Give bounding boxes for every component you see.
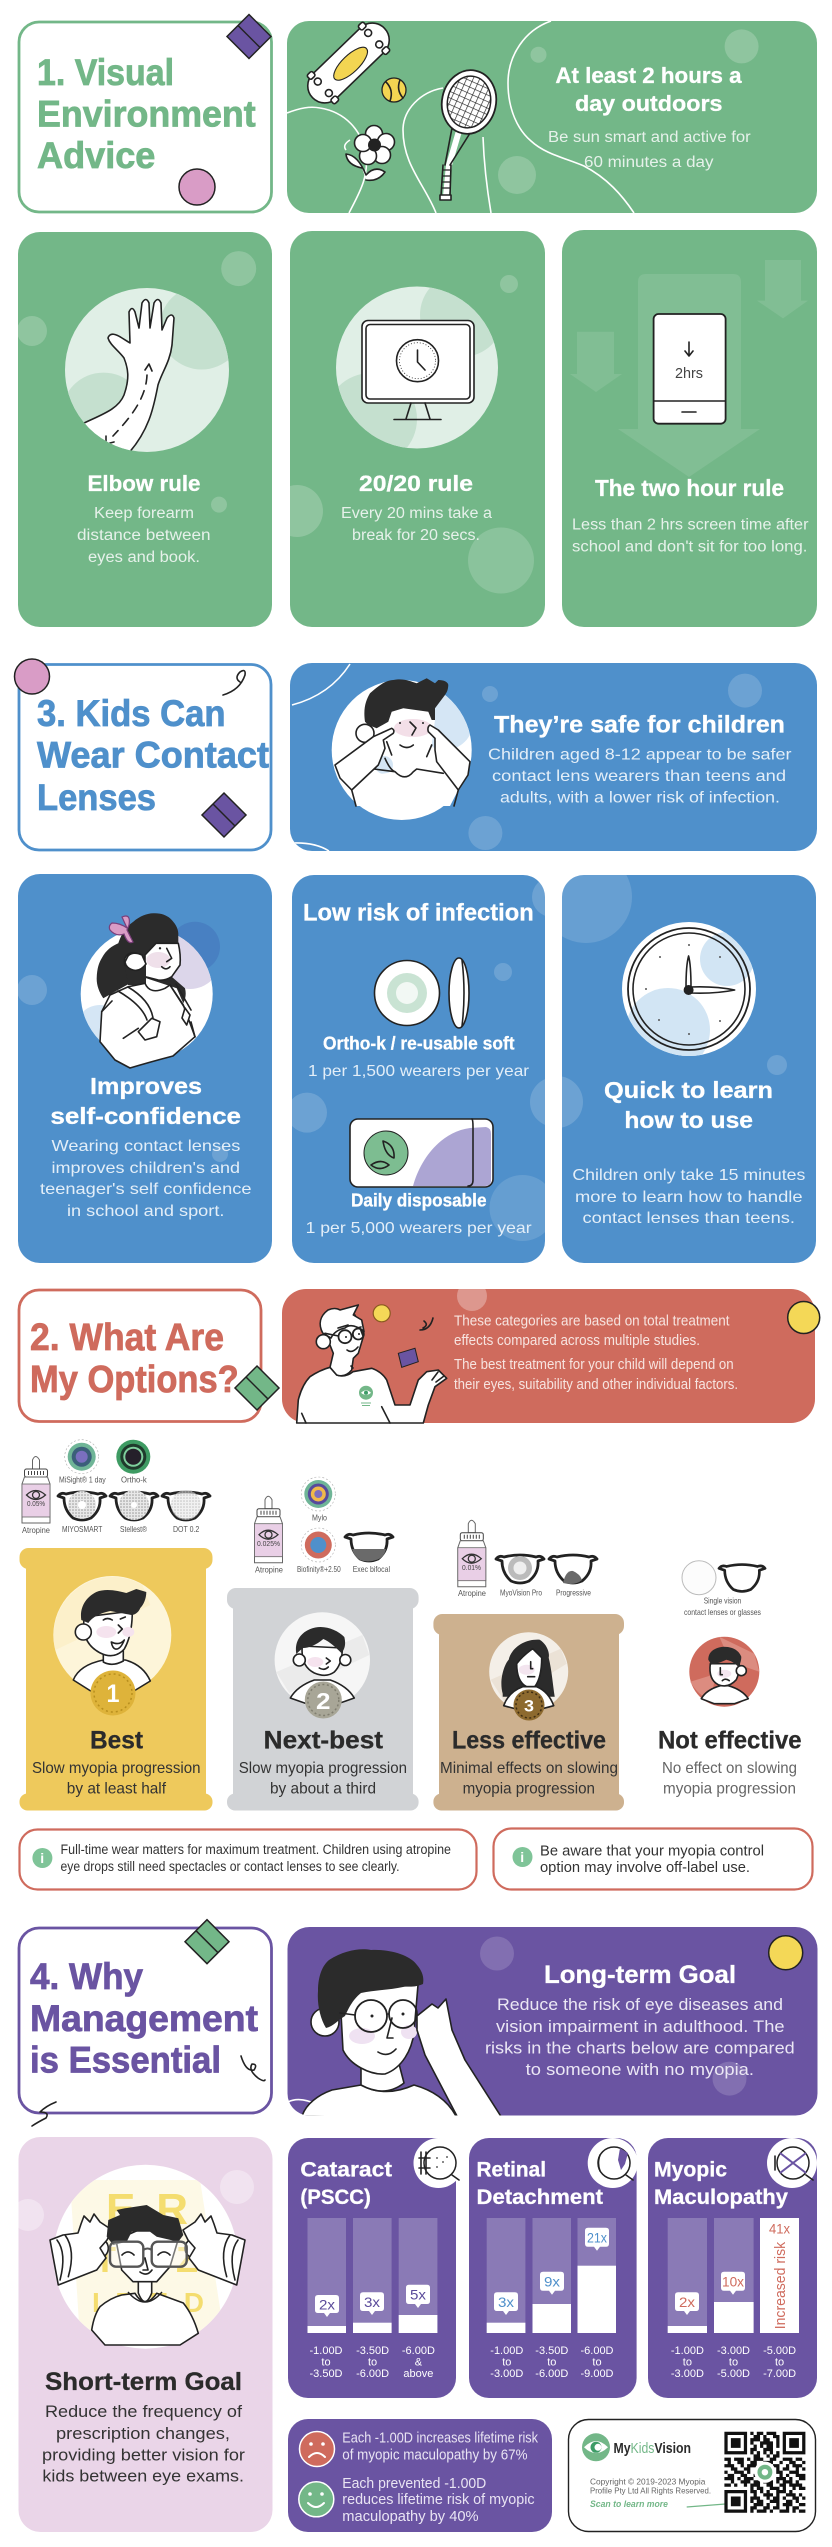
icon: bronze medal (514, 1690, 544, 1720)
text: full-time wear note: eye drops still need spectacles or contact lenses to see clearly. (60, 1859, 400, 1874)
text: Improves self-confidence (40, 1073, 252, 1220)
bar chart: retinal detachment risk: 21x (587, 2230, 607, 2246)
panel: 2. What Are My Options? title card (19, 1290, 279, 1422)
text: Daily disposable: 1 per 5,000 wearers per year (306, 1220, 532, 1237)
panel: Retinal Detachment chart (469, 2138, 638, 2398)
text: Short-term Goal: Short-term Goal (45, 2368, 242, 2396)
text: Short-term Goal: prescription changes, (56, 2425, 230, 2443)
text: each prevented -1.00D reduces risk: Each prevented -1.00D (342, 2475, 486, 2492)
face (145, 943, 180, 980)
title: 3. Kids Can Wear Contact Lenses: Lenses (37, 777, 156, 818)
icon: info: i (520, 1849, 524, 1865)
icon: flower (345, 126, 394, 180)
illustration: girl with backpack (75, 913, 221, 1068)
labels: retinal axis: to (502, 2357, 511, 2369)
text: They're safe for children: Children aged 8-12 appear to be safer (488, 746, 792, 763)
icons: best treatment options: Atropine (22, 1525, 50, 1535)
icons: less effective treatment options: MyoVision Pro (500, 1588, 542, 1598)
title: 2. What Are My Options? (30, 1317, 239, 1401)
bar chart: myopic maculopathy risk: 10x (722, 2274, 744, 2290)
icon: phone showing 2hrs (654, 314, 726, 424)
body (100, 983, 195, 1068)
text: full-time wear note (60, 1842, 451, 1874)
icons: less effective treatment options: Atropine (458, 1588, 486, 1598)
title: 3. Kids Can Wear Contact Lenses (37, 693, 269, 818)
eye chart letters: T Z (94, 2239, 198, 2280)
icon: info: i (40, 1850, 44, 1866)
panel: Cataract (PSCC) chart (288, 2138, 464, 2398)
eye chart letters: E R (106, 2185, 188, 2234)
illustration: sad boy (689, 1637, 759, 1707)
icon: myopic maculopathy eye (767, 2138, 817, 2188)
text: Best (32, 1727, 200, 1798)
text: Next-best: Slow myopia progression (239, 1760, 407, 1777)
text: category explanation: The best treatment for your child will depend on (454, 1357, 734, 1373)
labels: cataract axis: to (321, 2357, 331, 2369)
labels: retinal axis (490, 2345, 614, 2380)
icons: next-best treatment options: Mylo (312, 1513, 327, 1523)
icon: info (32, 1848, 52, 1868)
text: 20/20 rule: break for 20 secs. (352, 527, 480, 544)
callout: off-label use (494, 1828, 812, 1890)
text: off-label note: option may involve off-label use. (540, 1860, 750, 1876)
text: Short-term Goal (42, 2368, 246, 2486)
text: 20/20 rule: 20/20 rule (359, 471, 473, 496)
text: Quick to learn how to use: how to use (624, 1107, 753, 1133)
icon: green box (185, 1920, 229, 1964)
icon: squiggle (420, 1318, 433, 1330)
text: each -1.00D increases risk: Each -1.00D increases lifetime risk (342, 2430, 538, 2447)
text: Long-term Goal: Long-term Goal (544, 1961, 736, 1989)
QR code (724, 2432, 805, 2513)
text: full-time wear note: Full-time wear matters for maximum treatment. Children using atropine (60, 1842, 451, 1857)
panel: lifetime risk facts (288, 2419, 552, 2532)
panel: Improves self-confidence (17, 874, 272, 1263)
title: 4. Why Management is Essential: Management (30, 1998, 258, 2039)
text: They're safe for children: adults, with a lower risk of infection. (500, 790, 780, 806)
text: Not effective: Not effective (658, 1727, 802, 1755)
labels: retinal axis: -1.00D (490, 2345, 523, 2357)
icon: squiggle (32, 2102, 56, 2126)
text: Ortho-k / re-usable soft: 1 per 1,500 wearers per year (308, 1063, 530, 1080)
labels: maculopathy axis: -3.00D (671, 2368, 704, 2380)
labels: retinal axis: to (547, 2357, 556, 2369)
title: 3. Kids Can Wear Contact Lenses: 3. Kids Can (37, 693, 226, 734)
icons: not effective treatment options (682, 1561, 765, 1617)
title: 2. What Are My Options?: 2. What Are (30, 1317, 224, 1359)
title: 4. Why Management is Essential: 4. Why (30, 1956, 143, 1997)
text: Improves self-confidence: improves children's and (52, 1160, 240, 1177)
face (116, 2225, 178, 2282)
text: At least 2 hours a day outdoors (548, 63, 751, 171)
labels: maculopathy axis: -7.00D (763, 2368, 796, 2380)
text: Quick to learn how to use: Quick to learn (604, 1077, 773, 1103)
labels: retinal axis: -6.00D (580, 2345, 614, 2357)
text: category explanation (454, 1314, 738, 1393)
heading: Myopic Maculopathy: Maculopathy (654, 2185, 788, 2209)
icon: squiggle (223, 671, 245, 695)
heading: Retinal Detachment: Detachment (476, 2185, 603, 2209)
text: Elbow rule: Keep forearm (94, 505, 194, 522)
bar chart: myopic maculopathy risk: 41x (769, 2220, 790, 2236)
panel: outdoors (287, 14, 817, 213)
panel: They're safe for children (290, 663, 817, 851)
icon: small down arrow right (757, 260, 808, 318)
text: Quick to learn how to use: contact lenses than teens. (582, 1210, 795, 1227)
labels: cataract axis: & (415, 2357, 423, 2369)
icon: sad face (300, 2432, 334, 2466)
icons: best treatment options: Ortho-k (121, 1475, 147, 1485)
labels: cataract axis: to (368, 2357, 377, 2369)
bar chart: retinal detachment risk (487, 2218, 616, 2333)
text: Quick to learn how to use: Children only take 15 minutes (572, 1167, 805, 1184)
bar chart: cataract risk: 5x (410, 2286, 426, 2302)
title: 1. Visual Environment Advice (37, 52, 256, 176)
text: Next-best: Next-best (264, 1727, 384, 1755)
icons: next-best treatment options: 0.025% (257, 1541, 280, 1548)
text: Long-term Goal: vision impairment in adulthood. The (496, 2018, 785, 2036)
text: Next-best (239, 1727, 407, 1798)
icon: ortho-k lens front and side (374, 958, 469, 1028)
icons: next-best treatment options: Biofinity®+2.50 (297, 1564, 341, 1574)
icons: not effective treatment options: Single vision (704, 1596, 742, 1606)
panel: Myopic Maculopathy chart (648, 2138, 817, 2398)
text: Elbow rule: eyes and book. (88, 549, 200, 566)
text: copyright (590, 2476, 711, 2495)
title: 1. Visual Environment Advice: 1. Visual (37, 52, 174, 93)
labels: maculopathy axis: -5.00D (717, 2368, 750, 2380)
bar chart: cataract risk: 3x (364, 2294, 380, 2310)
text: At least 2 hours a day outdoors: day outdoors (575, 91, 722, 116)
icon: info (512, 1847, 532, 1867)
icon: gold medal: 1 (106, 1680, 120, 1708)
panel: 4. Why Management is Essential title card (19, 1920, 272, 2126)
icon: silver medal: 2 (316, 1688, 330, 1714)
text: Not effective: No effect on slowing (662, 1760, 797, 1777)
text: 20/20 rule (341, 471, 492, 544)
icon: purple box (227, 14, 271, 58)
panel: 1. Visual Environment Advice title card (19, 14, 272, 212)
heading: Myopic Maculopathy: Myopic (654, 2158, 727, 2182)
text: Elbow rule: Elbow rule (88, 471, 200, 496)
labels: cataract axis: -6.00D (402, 2345, 435, 2357)
text: Elbow rule (77, 471, 211, 566)
icon: small down arrow left (570, 332, 622, 392)
text: off-label note (540, 1844, 764, 1876)
bar chart: myopic maculopathy risk: 2x (679, 2294, 695, 2310)
text: Ortho-k / re-usable soft: Ortho-k / re-usable soft (323, 1034, 515, 1054)
hair (107, 2205, 183, 2245)
text: They're safe for children: contact lens wearers than teens and (492, 768, 786, 785)
text: each -1.00D increases risk (342, 2430, 538, 2463)
panel: Not effective (658, 1637, 802, 1798)
icons: best treatment options: MIYOSMART (62, 1524, 102, 1534)
text: Quick to learn how to use (572, 1077, 805, 1227)
text: The two hour rule: school and don't sit for too long. (572, 538, 807, 555)
illustration: girl with medal (489, 1632, 568, 1711)
labels: maculopathy axis: to (775, 2357, 784, 2369)
text: MyKidsVision: MyKidsVision (614, 2440, 691, 2457)
title: 1. Visual Environment Advice: Advice (37, 135, 155, 176)
text: At least 2 hours a day outdoors: Be sun smart and active for (548, 129, 751, 146)
labels: cataract axis: -6.00D (356, 2368, 389, 2380)
icon: happy face (299, 2482, 334, 2517)
icon: daily disposable blister pack (350, 1119, 493, 1187)
text: Less effective: Less effective (452, 1727, 606, 1755)
panel: MyKidsVision logo and QR (568, 2420, 816, 2532)
bar chart: retinal detachment risk: 9x (544, 2274, 560, 2290)
icon: gold medal (90, 1670, 136, 1716)
text: 20/20 rule: Every 20 mins take a (341, 505, 492, 522)
labels: maculopathy axis: -1.00D (671, 2345, 704, 2357)
bar chart: cataract risk: 2x (319, 2296, 335, 2312)
icon: tennis ball (382, 78, 406, 102)
text: Daily disposable: Daily disposable (351, 1191, 486, 1211)
icons: next-best treatment options: Exec bifocal (353, 1564, 390, 1574)
face (387, 708, 435, 765)
panel: Short-term Goal (12, 2137, 272, 2532)
icon: yellow sun (769, 1936, 803, 1970)
text: Short-term Goal: kids between eye exams. (42, 2468, 244, 2486)
heading: Retinal Detachment (476, 2158, 603, 2209)
icons: best treatment options: 0.05% (27, 1501, 45, 1508)
panel: Elbow rule (17, 232, 272, 627)
labels: cataract axis: -1.00D (309, 2345, 343, 2357)
icon: tennis racket (436, 65, 502, 200)
text: Less effective: myopia progression (463, 1780, 595, 1798)
panel: 3. Kids Can Wear Contact Lenses title card (14, 659, 271, 850)
heading: Myopic Maculopathy (654, 2158, 788, 2209)
bar chart: myopic maculopathy risk (668, 2218, 799, 2333)
icons: best treatment options: MiSight® 1 day (59, 1475, 106, 1485)
body (352, 770, 458, 806)
labels: retinal axis: -9.00D (580, 2368, 614, 2380)
heading: Low risk of infection: Low risk of infection (303, 900, 534, 927)
panel: The two hour rule (562, 230, 817, 627)
text: They're safe for children (488, 712, 792, 806)
panel: category explanation (282, 1281, 820, 1423)
icon: squiggle (241, 2056, 265, 2081)
labels: retinal axis: to (592, 2357, 602, 2369)
text: Best: by at least half (67, 1780, 167, 1798)
icons: best treatment options (22, 1440, 210, 1535)
icon: purple box (398, 1348, 418, 1367)
icon: small yellow ball (373, 1305, 390, 1322)
glasses (110, 2242, 143, 2267)
text: each prevented -1.00D reduces risk: maculopathy by 40% (342, 2508, 479, 2525)
panel: Next-best (227, 1588, 419, 1810)
text: each -1.00D increases risk: of myopic maculopathy by 67% (342, 2446, 528, 2463)
bar chart: retinal detachment risk: 3x (498, 2294, 514, 2310)
heading: Cataract (PSCC): (PSCC) (300, 2185, 371, 2209)
illustration: forearm and hand (65, 288, 229, 452)
icon: MyKidsVision logo (582, 2433, 610, 2461)
text: category explanation: effects compared across multiple studies. (454, 1333, 700, 1349)
arms (50, 2214, 112, 2285)
text: The two hour rule (572, 475, 808, 555)
text: Not effective (658, 1727, 802, 1798)
text: Best: Best (90, 1727, 144, 1755)
icon: pink ball (179, 169, 215, 205)
labels: retinal axis: -3.00D (490, 2368, 523, 2380)
text: each prevented -1.00D reduces risk: reduces lifetime risk of myopic (342, 2491, 535, 2508)
icons: next-best treatment options (254, 1477, 393, 1575)
hands (335, 728, 394, 790)
text: each prevented -1.00D reduces risk (342, 2475, 535, 2525)
icon: phone showing 2hrs: 2hrs (675, 365, 703, 382)
text: The two hour rule: Less than 2 hrs screen time after (572, 516, 808, 533)
icon: skateboard (299, 14, 398, 112)
icons: next-best treatment options: Atropine (255, 1565, 283, 1575)
icon: bronze medal: 3 (524, 1696, 534, 1716)
body (92, 2293, 198, 2345)
text: Elbow rule: distance between (77, 527, 211, 544)
text: Improves self-confidence: self-confidence (50, 1103, 241, 1129)
text: Long-term Goal: risks in the charts below are compared (485, 2039, 795, 2057)
labels: cataract axis: -3.50D (356, 2345, 389, 2357)
title: 3. Kids Can Wear Contact Lenses: Wear Contact (37, 735, 269, 776)
text: Daily disposable (306, 1191, 532, 1237)
labels: retinal axis: -3.50D (535, 2345, 568, 2357)
text: Short-term Goal: Reduce the frequency of (45, 2403, 242, 2421)
panel: Long-term Goal (288, 1927, 818, 2118)
heading: Retinal Detachment: Retinal (476, 2158, 546, 2182)
text: At least 2 hours a day outdoors: At least 2 hours a (555, 63, 742, 88)
labels: cataract axis: -3.50D (309, 2368, 343, 2380)
icon: pink ball (14, 659, 50, 694)
labels: maculopathy axis: to (683, 2357, 692, 2369)
text: Quick to learn how to use: more to learn how to handle (575, 1189, 803, 1206)
icon: yellow sun (788, 1302, 820, 1334)
eye chart letters: I E E D (92, 2287, 204, 2318)
title: 4. Why Management is Essential: is Essential (30, 2040, 221, 2080)
labels: maculopathy axis (671, 2345, 796, 2380)
icon: silver medal (305, 1682, 342, 1718)
text: Best: Slow myopia progression (32, 1760, 200, 1777)
icon: purple box (202, 793, 246, 837)
panel: 20/20 rule (271, 231, 545, 627)
text: Long-term Goal: Reduce the risk of eye diseases and (497, 1996, 783, 2014)
panel: Quick to learn how to use (562, 875, 816, 1263)
heading: Cataract (PSCC): Cataract (300, 2158, 392, 2182)
bar chart: cataract risk (308, 2218, 437, 2333)
text: copyright: Copyright © 2019-2023 Myopia (590, 2476, 706, 2486)
text: category explanation: their eyes, suitability and other individual factors. (454, 1377, 738, 1393)
text: category explanation: These categories are based on total treatment (454, 1314, 730, 1330)
text: Ortho-k / re-usable soft (308, 1034, 530, 1080)
text: Improves self-confidence: in school and sport. (67, 1203, 224, 1220)
text: Long-term Goal: to someone with no myopia. (526, 2061, 754, 2079)
labels: maculopathy axis: -5.00D (763, 2345, 796, 2357)
text: off-label note: Be aware that your myopia control (540, 1844, 764, 1860)
eye chart letters (92, 2185, 204, 2318)
icons: best treatment options: Stellest® (120, 1524, 148, 1534)
text: Less effective: Minimal effects on slowing (440, 1760, 618, 1777)
text: The two hour rule: The two hour rule (595, 475, 784, 501)
text: Improves self-confidence: Wearing contact lenses (52, 1138, 240, 1155)
bar chart: myopic maculopathy risk: Increased risk (772, 2241, 789, 2329)
icon: retinal detachment eye (588, 2138, 638, 2188)
text: Improves self-confidence: teenager's self confidence (40, 1181, 252, 1198)
illustration: boy with medal (275, 1612, 370, 1708)
illustration: clock (622, 922, 756, 1056)
labels: retinal axis: -6.00D (535, 2368, 568, 2380)
text: They're safe for children: They’re safe for children (494, 712, 785, 738)
illustration: boy with trial glasses and eye chart (50, 2165, 245, 2349)
icon: cataract eye (414, 2138, 464, 2188)
text: scan to learn more: Scan to learn more (590, 2499, 668, 2509)
labels: cataract axis: above (403, 2368, 433, 2380)
illustration: smiling boy with medal (53, 1576, 171, 1694)
text: Next-best: by about a third (270, 1780, 376, 1798)
hair (97, 913, 186, 1003)
labels: cataract axis (309, 2345, 435, 2380)
text: Improves self-confidence: Improves (90, 1073, 202, 1099)
illustration: boy inserting contact lens (332, 678, 473, 820)
icon: large down arrow (618, 274, 760, 477)
title: 1. Visual Environment Advice: Environment (37, 94, 256, 134)
icons: less effective treatment options: Progressive (556, 1588, 591, 1598)
text: Less effective (440, 1727, 618, 1798)
illustration: man with glasses (297, 1305, 447, 1423)
panel: Less effective (433, 1614, 624, 1810)
illustration: monitor with clock (336, 286, 498, 448)
title: 4. Why Management is Essential (30, 1956, 258, 2080)
labels: maculopathy axis: to (729, 2357, 738, 2369)
arrow: to QR code (687, 2504, 725, 2507)
text: At least 2 hours a day outdoors: 60 minutes a day (584, 154, 714, 171)
panel: Best (20, 1548, 212, 1810)
labels: maculopathy axis: -3.00D (717, 2345, 750, 2357)
heading: Cataract (PSCC) (300, 2158, 392, 2209)
icons: less effective treatment options (458, 1520, 597, 1598)
title: 2. What Are My Options?: My Options? (30, 1359, 239, 1401)
text: Not effective: myopia progression (663, 1780, 796, 1798)
icons: best treatment options: DOT 0.2 (173, 1524, 200, 1534)
illustration: man adjusting glasses (302, 1949, 502, 2118)
icons: not effective treatment options: contact lenses or glasses (684, 1607, 761, 1617)
callout: full-time wear (20, 1830, 476, 1890)
panel: Low risk of infection (292, 875, 545, 1263)
icons: less effective treatment options: 0.01% (462, 1565, 481, 1572)
icon: green box (235, 1366, 279, 1410)
text: copyright: Profile Pty Ltd All Rights Reserved. (590, 2485, 711, 2495)
text: Long-term Goal (485, 1961, 795, 2079)
text: Short-term Goal: providing better vision for (42, 2446, 246, 2464)
